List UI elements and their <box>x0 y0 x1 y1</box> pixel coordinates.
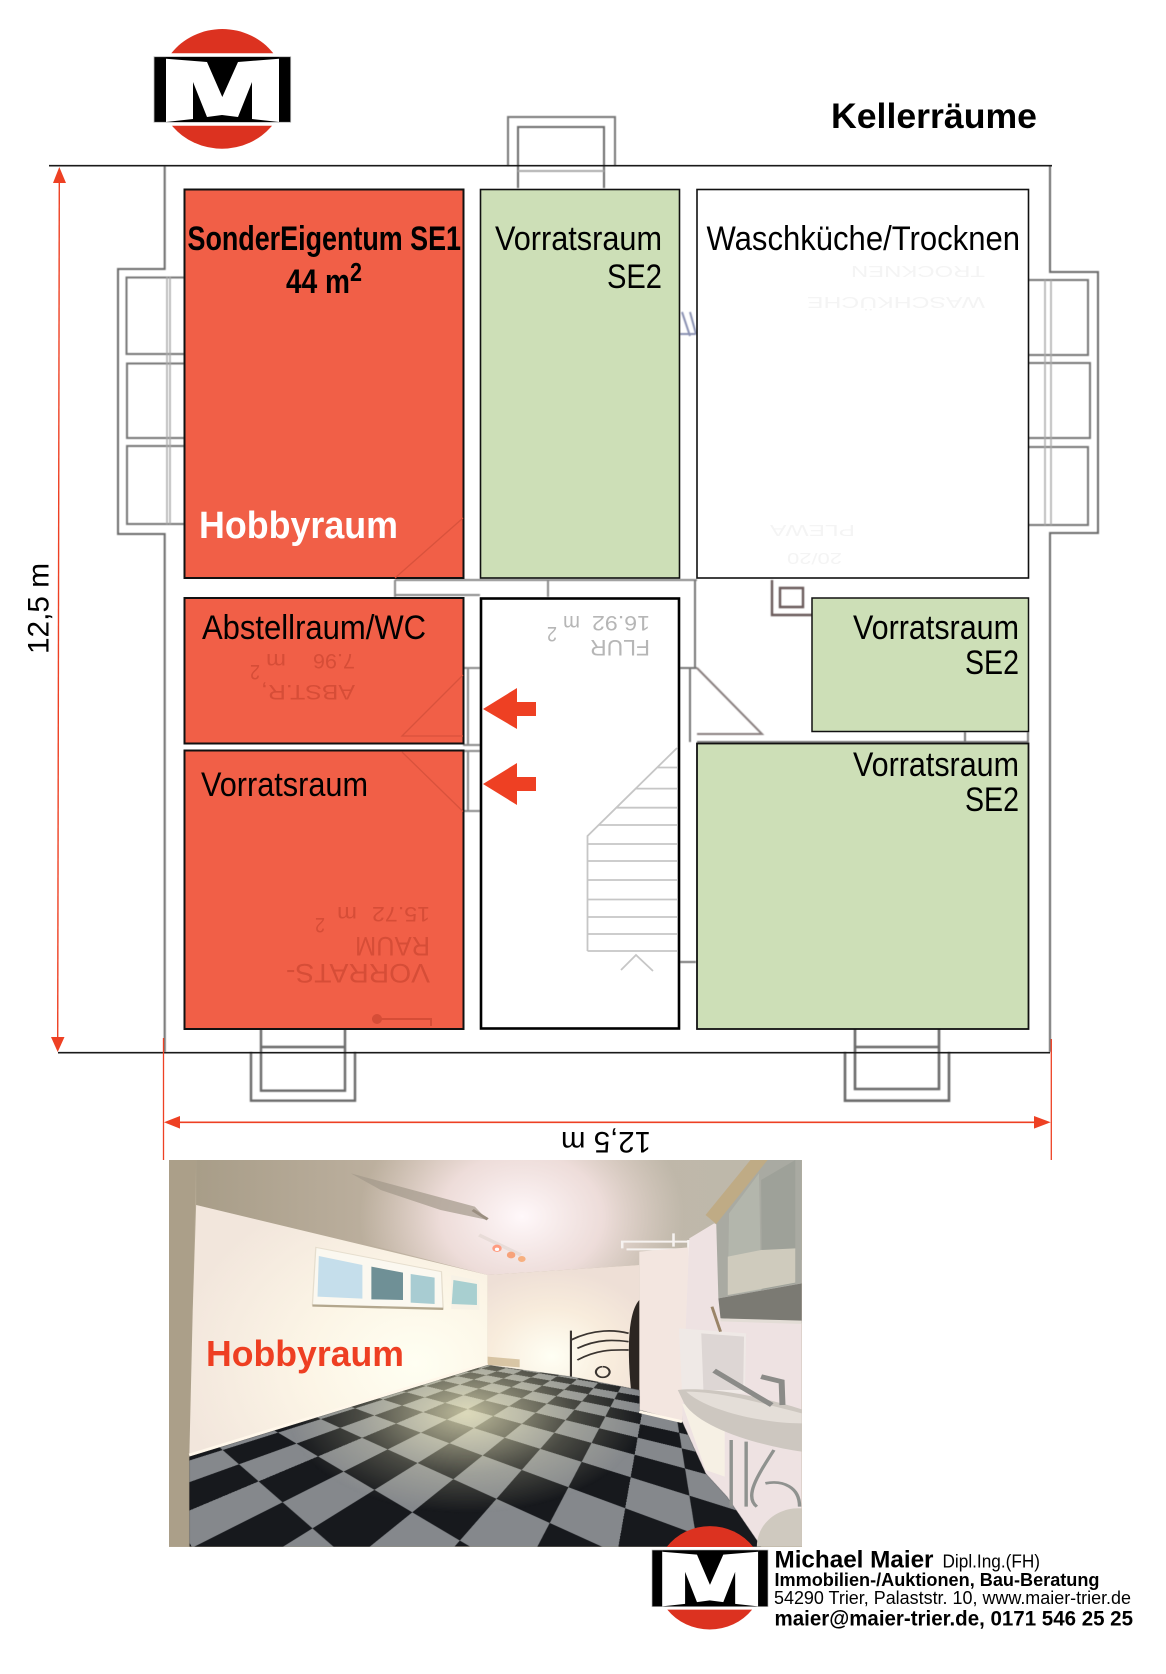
ghost text: 2 <box>250 660 260 683</box>
photo: floor frame <box>189 1364 762 1547</box>
photo background: ceiling and walls <box>169 1160 802 1546</box>
logo top <box>154 29 291 149</box>
toilet <box>757 1508 802 1547</box>
ceiling shadow <box>351 1173 488 1220</box>
room: Abstellraum/WC <box>184 598 464 744</box>
ceiling <box>196 1160 802 1275</box>
faint text: WASCHKÜCHE <box>807 293 985 311</box>
tiles nearest part <box>618 1410 762 1547</box>
dimension: height <box>22 166 1052 1053</box>
logo footer <box>652 1526 768 1629</box>
superscript: 2 <box>350 257 362 287</box>
tiles second part <box>174 1367 563 1588</box>
back wall <box>488 1265 639 1390</box>
right wall <box>682 1223 802 1547</box>
ghost text: VORRATS- <box>286 958 430 988</box>
label: Waschküche/Trocknen <box>706 220 1020 258</box>
owner: SE2 <box>607 258 662 296</box>
faint text: PLEWA <box>769 521 855 538</box>
label: Abstellraum/WC <box>202 609 426 647</box>
photo foreground: bathroom fittings <box>188 1160 802 1546</box>
sink <box>678 1389 802 1452</box>
ghost text <box>286 902 431 1026</box>
SE1 heading: SonderEigentum SE1 <box>188 220 461 258</box>
faint text: 20/20 <box>787 549 842 566</box>
room: Vorratsraum SE2 small <box>812 598 1028 732</box>
tiles third part <box>190 1371 642 1547</box>
faint text <box>769 262 985 566</box>
building plan walls and shafts <box>118 117 1098 1101</box>
tiles near part <box>460 1378 647 1626</box>
light on floor <box>300 1365 632 1506</box>
room name: Hobbyraum <box>199 505 398 547</box>
room: Vorratsraum SE2 large <box>697 744 1028 1029</box>
ghost text: m <box>337 902 357 925</box>
faint door swing <box>395 518 463 578</box>
owner: SE2 <box>965 781 1019 819</box>
faint text: TROCKNEN <box>851 262 985 279</box>
label: Vorratsraum <box>853 746 1019 784</box>
pipes <box>622 1233 699 1327</box>
door frame left <box>169 1160 196 1547</box>
ghost text: RAUM <box>355 931 430 961</box>
room: Hobbyraum SE1 <box>184 190 464 578</box>
owner: SE2 <box>965 644 1019 682</box>
mirror cabinet <box>706 1160 802 1324</box>
room: Vorratsraum SE1 <box>184 750 464 1029</box>
entrance arrow 1 <box>483 688 536 729</box>
ghost text: FLUR <box>590 635 650 660</box>
ceiling light glow <box>321 1160 727 1275</box>
label: Vorratsraum <box>853 609 1019 647</box>
door swing <box>402 675 463 736</box>
perspective plane <box>189 1365 762 1547</box>
left wall <box>189 1205 488 1457</box>
radiator <box>679 1328 746 1477</box>
pillar <box>639 1247 689 1422</box>
ghost text: 15.72 <box>372 902 430 925</box>
checkered carpet floor <box>189 1364 762 1547</box>
entrance arrow 2 <box>483 763 536 805</box>
ghost text <box>547 611 650 660</box>
room: Waschküche <box>697 190 1028 578</box>
label: Vorratsraum <box>495 220 662 258</box>
services: Immobilien-/Auktionen, Bau-Beratung <box>774 1570 1100 1590</box>
width value: 12,5 m <box>561 1125 651 1158</box>
room: Vorratsraum SE2 top <box>480 190 680 578</box>
damp patch <box>488 1357 520 1367</box>
bed headboard <box>571 1300 639 1407</box>
degree: Dipl.Ing.(FH) <box>942 1552 1040 1572</box>
area: 44 m <box>286 263 350 301</box>
label: Vorratsraum <box>201 766 368 804</box>
ghost text: ABST.R, <box>261 680 355 703</box>
faucet <box>714 1371 782 1405</box>
room: Flur <box>481 598 679 1028</box>
email and phone: maier@maier-trier.de, 0171 546 25 25 <box>774 1608 1133 1631</box>
ghost text: 2 <box>315 913 325 936</box>
address: 54290 Trier, Palaststr. 10, www.maier-trier.de <box>774 1588 1131 1608</box>
window <box>312 1247 479 1310</box>
pipes under sink <box>731 1440 800 1507</box>
ghost text <box>250 649 355 703</box>
height value: 12,5 m <box>22 563 56 654</box>
baseboards <box>189 1363 682 1455</box>
title: Kellerräume <box>831 97 1037 136</box>
ghost text: 16.92 <box>592 611 650 634</box>
tiles far part <box>189 1365 623 1547</box>
faint plan marks <box>680 312 696 336</box>
name: Michael Maier <box>774 1547 934 1574</box>
ghost text: m <box>266 649 286 672</box>
towel hook <box>712 1307 721 1332</box>
photo label: Hobbyraum <box>206 1333 404 1374</box>
ghost text: 7.96 <box>313 649 355 672</box>
dimension: width <box>164 1038 1051 1160</box>
contact block <box>774 1547 1133 1631</box>
ghost text: 2 <box>547 622 557 645</box>
ceiling lamp <box>473 1210 526 1262</box>
stairs <box>588 748 677 971</box>
door swing <box>402 752 463 812</box>
photo: hobby room <box>169 1160 802 1547</box>
ghost text: m <box>563 611 580 634</box>
